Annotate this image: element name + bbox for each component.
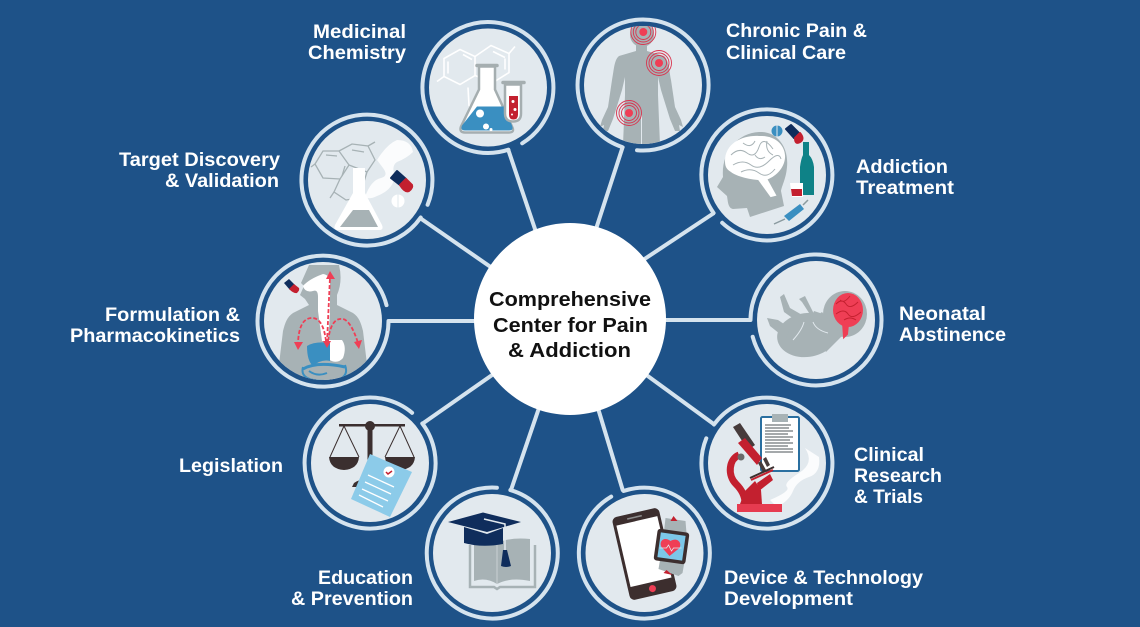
label: device and technology development: Development <box>724 588 854 610</box>
icon: graduation cap and book <box>448 512 535 589</box>
label: chronic pain and clinical care <box>726 20 867 64</box>
label: addiction treatment <box>856 156 955 199</box>
node: addiction treatment <box>701 109 832 240</box>
label: clinical research and trials: Clinical <box>854 444 924 466</box>
label: target discovery and validation <box>119 149 280 192</box>
icon: microscope, clipboard, DNA <box>730 414 819 512</box>
label: addiction treatment: Treatment <box>856 177 955 199</box>
label: medicinal chemistry: Medicinal <box>313 21 406 43</box>
infographic: hub and spoke diagram <box>71 18 1006 621</box>
node: chronic pain and clinical care <box>578 19 709 150</box>
node: medicinal chemistry <box>422 22 553 153</box>
label: addiction treatment: Addiction <box>856 156 948 178</box>
central hub <box>474 223 666 415</box>
label: clinical research and trials: & Trials <box>854 486 923 508</box>
label: chronic pain and clinical care: Chronic Pain & <box>726 20 867 42</box>
central hub: & Addiction <box>508 340 631 362</box>
label: clinical research and trials: Research <box>854 465 942 487</box>
icon: scales of justice and document <box>329 421 415 517</box>
node: neonatal abstinence <box>750 254 882 385</box>
icon: human body with pain points <box>600 20 683 145</box>
icon: molecule, flask, DNA, capsule <box>311 140 413 230</box>
label: medicinal chemistry <box>308 21 406 64</box>
node: device and technology development <box>579 488 710 619</box>
label: medicinal chemistry: Chemistry <box>308 42 406 64</box>
connector spokes <box>389 146 751 491</box>
icon: digestive system with pill and arrows <box>277 265 369 381</box>
label: target discovery and validation: & Validation <box>165 170 279 192</box>
label: neonatal abstinence <box>899 303 1006 346</box>
label: neonatal abstinence: Neonatal <box>899 303 986 325</box>
icon: head with brain, pills, bottle, syringe <box>717 125 814 224</box>
icon: flask and test tube <box>437 46 524 132</box>
label: legislation: Legislation <box>179 455 283 477</box>
label: device and technology development: Device & Technology <box>724 567 923 589</box>
label: formulation and pharmacokinetics: Pharmacokinetics <box>70 325 240 347</box>
central hub: Center for Pain <box>493 315 648 337</box>
label: formulation and pharmacokinetics <box>70 304 240 347</box>
label: chronic pain and clinical care: Clinical Care <box>726 42 846 64</box>
label: formulation and pharmacokinetics: Formulation & <box>105 304 240 326</box>
icon: fetus with red brain <box>767 291 867 361</box>
label: target discovery and validation: Target Discovery <box>119 149 280 171</box>
node: education and prevention <box>427 488 558 619</box>
node: formulation and pharmacokinetics <box>258 256 389 387</box>
node: target discovery and validation <box>301 115 432 246</box>
label: education and prevention: & Prevention <box>291 588 413 610</box>
label: clinical research and trials <box>854 444 942 508</box>
label: device and technology development <box>724 567 923 610</box>
label: neonatal abstinence: Abstinence <box>899 324 1006 346</box>
icon: smartphone and smartwatch <box>612 507 690 601</box>
node: legislation <box>305 398 436 529</box>
node: clinical research and trials <box>701 398 832 529</box>
label: education and prevention <box>291 567 413 610</box>
label: education and prevention: Education <box>318 567 413 589</box>
central hub: Comprehensive <box>489 289 651 311</box>
